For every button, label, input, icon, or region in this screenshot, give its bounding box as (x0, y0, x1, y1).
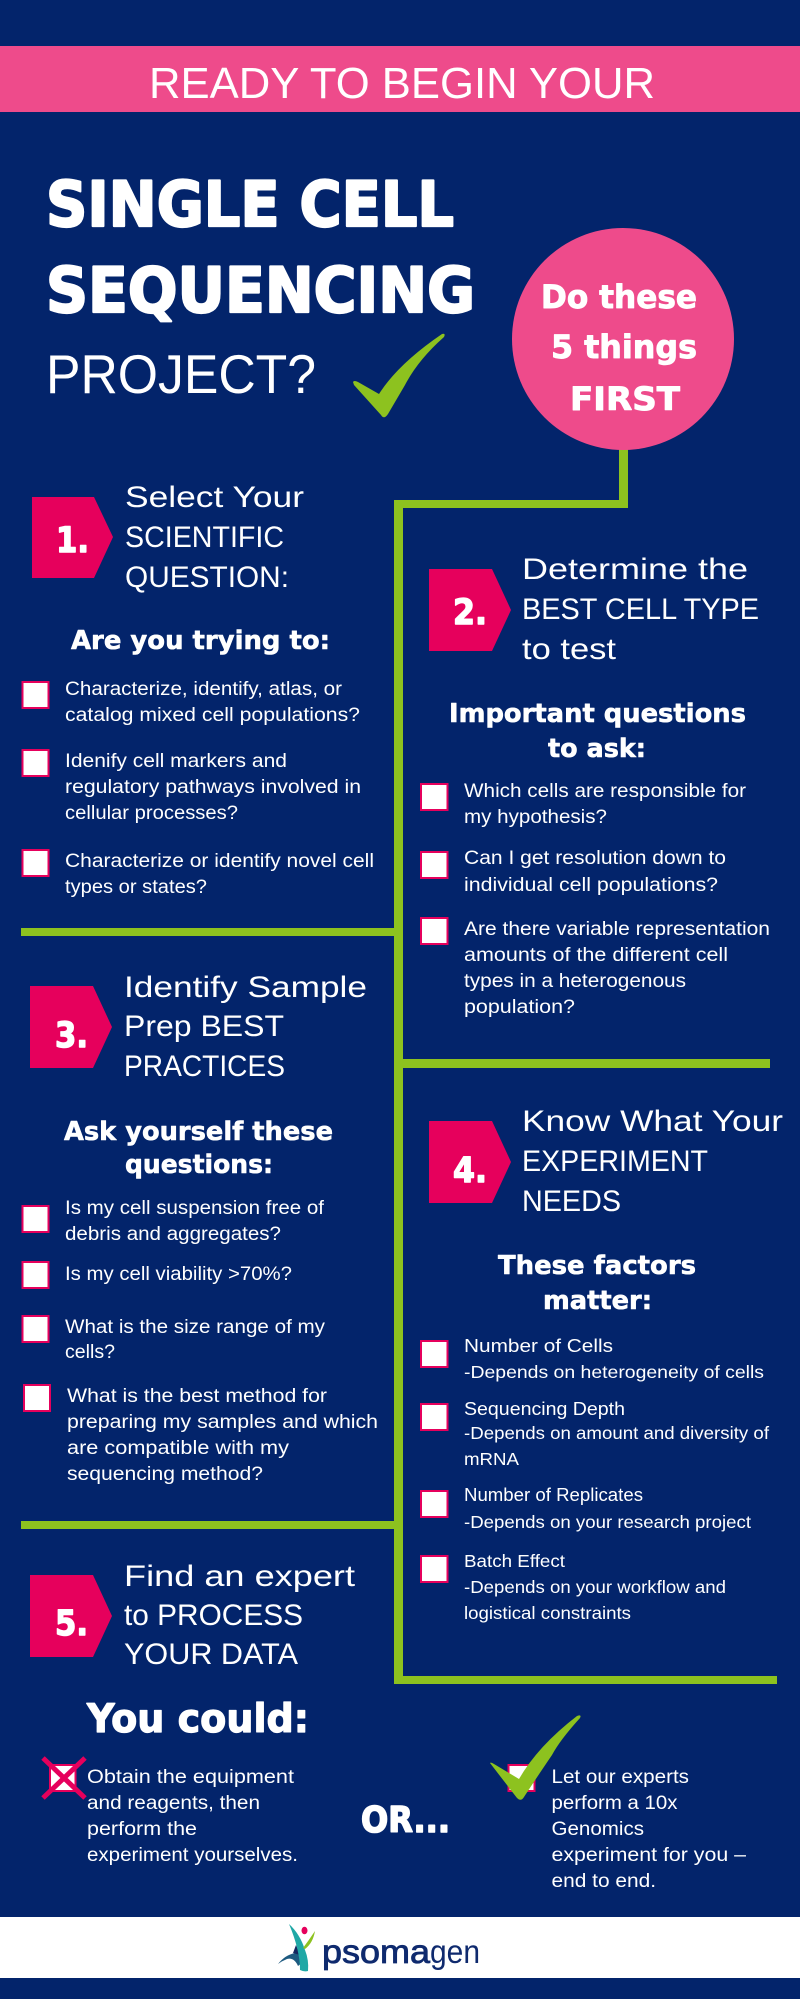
step 5 heading: YOUR DATA (124, 1638, 298, 1671)
step 5 heading: Find an expert (124, 1560, 356, 1593)
option: do it yourself, crossed out (43, 1758, 298, 1866)
checklist item: Are there variable representation (464, 919, 770, 940)
checklist item (22, 750, 361, 824)
top banner: READY TO BEGIN YOUR (149, 59, 655, 108)
checklist item (421, 918, 770, 1018)
title: SEQUENCING (46, 254, 475, 327)
factor: number of replicates: -Depends on your research project (464, 1512, 751, 1532)
step 4 heading: NEEDS (522, 1185, 621, 1218)
callout: do these 5 things first: Do these (541, 278, 697, 316)
connector lines (21, 448, 777, 1684)
option text: perform a 10x (552, 1793, 678, 1814)
checklist item: cells? (65, 1342, 115, 1363)
step 5 badge: 5. (55, 1604, 88, 1644)
checklist item: What is the size range of my (65, 1317, 326, 1338)
checklist item: types in a heterogenous (464, 971, 686, 992)
step 4 subheading: matter: (543, 1286, 652, 1316)
title: SINGLE CELL (46, 168, 454, 241)
checklist item (22, 1262, 292, 1288)
factor: batch effect (421, 1551, 726, 1623)
step 4 subheading: These factors (498, 1251, 696, 1281)
step 1 badge: 1. (56, 521, 89, 561)
step 1 badge (32, 497, 113, 578)
step 1 heading (125, 481, 304, 594)
step 5 heading (124, 1560, 356, 1671)
logo wordmark: gen (430, 1933, 480, 1970)
icon: crossed-out checkbox (43, 1758, 85, 1798)
callout: do these 5 things first: 5 things (551, 328, 697, 366)
checklist item: are compatible with my (67, 1438, 290, 1459)
step 5 subheading: You could: (86, 1697, 309, 1742)
checklist item: preparing my samples and which (67, 1412, 378, 1433)
step 2 subheading (449, 699, 746, 764)
panel: step 4 (421, 1105, 783, 1623)
step 2 heading (522, 553, 759, 666)
factor: number of cells (421, 1336, 764, 1382)
step 1 heading: SCIENTIFIC (125, 521, 284, 554)
step 5 badge (30, 1575, 112, 1657)
step 2 subheading: to ask: (548, 734, 646, 764)
option text: Obtain the equipment (87, 1767, 295, 1788)
step 5 heading: to PROCESS (124, 1599, 303, 1632)
step 3 heading (124, 971, 367, 1083)
factor: number of replicates (421, 1485, 751, 1532)
checklist item: cellular processes? (65, 803, 238, 824)
checklist item: my hypothesis? (464, 807, 607, 828)
option text: end to end. (552, 1871, 656, 1892)
panel: step 5 (30, 1560, 746, 1892)
option text (552, 1767, 746, 1892)
icon: checked checkbox (490, 1715, 581, 1800)
option text: Genomics (552, 1819, 644, 1840)
step 3 subheading: questions: (125, 1150, 273, 1180)
step 1 heading: Select Your (125, 481, 304, 514)
panel: step 3 (22, 971, 378, 1485)
title (46, 168, 475, 405)
top banner (0, 46, 800, 112)
factor: batch effect: logistical constraints (464, 1603, 631, 1623)
step 3 badge: 3. (55, 1016, 88, 1056)
checklist item: Idenify cell markers and (65, 751, 287, 772)
step 3 badge (30, 986, 112, 1068)
callout: do these 5 things first (512, 228, 734, 450)
or divider text: OR... (361, 1800, 450, 1841)
checklist item (22, 1198, 325, 1245)
step 2 heading: to test (522, 633, 617, 666)
step 2 badge: 2. (453, 593, 487, 633)
checklist item: Can I get resolution down to (464, 848, 726, 869)
checklist item: Is my cell suspension free of (65, 1198, 325, 1219)
step 2 heading: BEST CELL TYPE (522, 593, 759, 626)
title: PROJECT? (46, 343, 316, 405)
checklist item (22, 679, 360, 726)
checklist item: regulatory pathways involved in (65, 777, 361, 798)
step 4 heading: EXPERIMENT (522, 1145, 708, 1178)
checklist item (421, 848, 726, 896)
step 2 badge (429, 569, 511, 651)
callout: do these 5 things first: FIRST (570, 380, 680, 418)
step 1 subheading: Are you trying to: (71, 626, 330, 656)
checklist item: Characterize, identify, atlas, or (65, 679, 343, 700)
checklist item (22, 1316, 326, 1363)
step 4 subheading (498, 1251, 696, 1316)
option text (87, 1767, 298, 1866)
step 3 heading: Identify Sample (124, 971, 367, 1004)
step 2 subheading: Important questions (449, 699, 746, 729)
option text: Let our experts (552, 1767, 689, 1788)
option text: experiment for you – (552, 1845, 746, 1866)
option text: experiment yourselves. (87, 1845, 298, 1866)
checklist item: catalog mixed cell populations? (65, 705, 360, 726)
factor: number of cells: -Depends on heterogeneity of cells (464, 1362, 764, 1382)
factor: number of replicates: Number of Replicates (464, 1485, 643, 1505)
factor: batch effect: -Depends on your workflow and (464, 1577, 726, 1597)
checklist item: Which cells are responsible for (464, 781, 747, 802)
step 3 subheading: Ask yourself these (64, 1117, 333, 1147)
factor: number of cells: Number of Cells (464, 1336, 613, 1356)
checklist item (22, 850, 374, 898)
factor: sequencing depth: mRNA (464, 1449, 519, 1469)
step 4 heading: Know What Your (522, 1105, 783, 1138)
icon: psomagen logo mark (278, 1924, 315, 1971)
option text: and reagents, then (87, 1793, 260, 1814)
panel: step 2 (421, 553, 770, 1018)
checklist item: individual cell populations? (464, 875, 718, 896)
checklist item: What is the best method for (67, 1386, 328, 1407)
step 2 heading: Determine the (522, 553, 748, 586)
step 3 heading: PRACTICES (124, 1050, 285, 1083)
footer band with logo (0, 1917, 800, 1978)
checklist item: amounts of the different cell (464, 945, 728, 966)
step 4 badge: 4. (453, 1151, 487, 1191)
option text: perform the (87, 1819, 197, 1840)
option: let experts do it, checked (490, 1715, 746, 1892)
checklist item: Is my cell viability >70%? (65, 1264, 292, 1285)
checklist item (24, 1385, 378, 1485)
checklist item: Characterize or identify novel cell (65, 851, 374, 872)
checklist item: sequencing method? (67, 1464, 263, 1485)
factor: sequencing depth: Sequencing Depth (464, 1399, 625, 1419)
factor: batch effect: Batch Effect (464, 1551, 565, 1571)
icon: title check mark (353, 334, 445, 417)
checklist item: debris and aggregates? (65, 1224, 281, 1245)
checklist item: types or states? (65, 877, 207, 898)
step 3 heading: Prep BEST (124, 1010, 284, 1043)
step 4 badge (429, 1121, 511, 1203)
logo wordmark: psoma (322, 1933, 431, 1970)
step 3 subheading (64, 1117, 333, 1180)
factor: sequencing depth: -Depends on amount and diversity of (464, 1423, 769, 1443)
step 1 heading: QUESTION: (125, 561, 289, 594)
logo wordmark (322, 1933, 480, 1970)
step 4 heading (522, 1105, 783, 1218)
factor: sequencing depth (421, 1399, 769, 1469)
checklist item: population? (464, 997, 575, 1018)
checklist item (421, 781, 747, 828)
panel: step 1 (22, 481, 374, 898)
